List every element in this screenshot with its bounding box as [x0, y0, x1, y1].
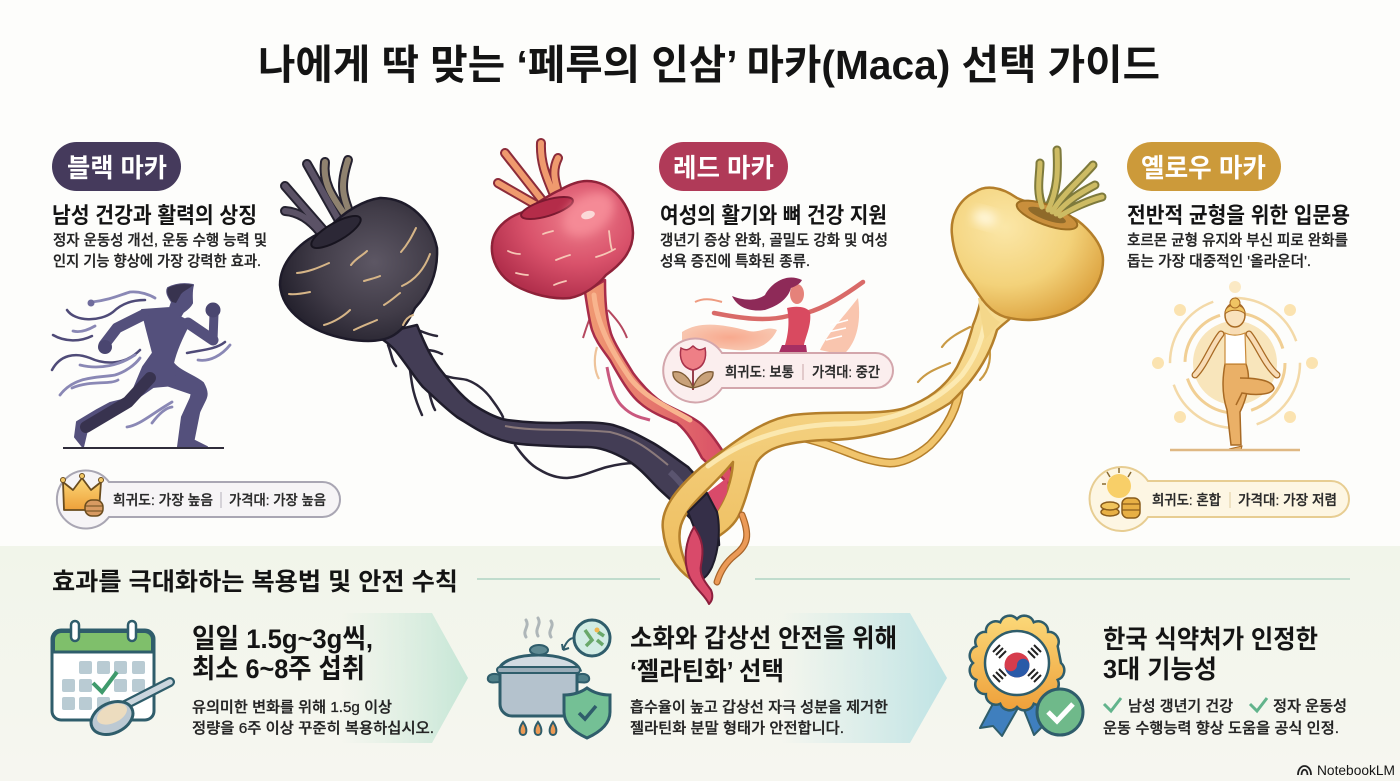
red maca description: 성욕 증진에 특화된 종류.	[660, 253, 810, 270]
black maca turnip	[280, 160, 437, 341]
panel: red maca	[659, 142, 893, 402]
icon: dancing woman	[682, 278, 863, 360]
black maca pill heading: 블랙 마카	[67, 153, 167, 183]
dosage heading: 최소 6~8주 섭취	[192, 654, 365, 684]
red maca turnip	[492, 143, 633, 298]
rarity and price text: 가격대: 중간	[812, 364, 880, 380]
icon: crown and coins	[60, 474, 104, 516]
certification heading	[1103, 626, 1318, 684]
black maca root	[375, 325, 719, 545]
rarity and price text: 희귀도: 혼합	[1152, 492, 1221, 508]
certification heading: 한국 식약처가 인정한	[1103, 626, 1318, 654]
icon: sun and coins	[1101, 468, 1140, 518]
rarity and price text	[725, 364, 880, 380]
title: 나에게 딱 맞는 ‘페루의 인삼’ 마카(Maca) 선택 가이드	[258, 42, 1160, 88]
dosage description: 유의미한 변화를 위해 1.5g 이상	[192, 699, 392, 716]
black maca description: 인지 기능 향상에 가장 강력한 효과.	[53, 253, 261, 270]
rarity and price text	[113, 492, 326, 508]
yellow maca description	[1127, 232, 1348, 270]
panel: yellow maca	[1090, 142, 1350, 531]
black maca subheading: 남성 건강과 활력의 상징	[52, 203, 257, 228]
dosage heading	[192, 624, 373, 684]
icon: yoga tree pose	[1152, 281, 1318, 450]
arrow: gelatinized to certification	[780, 613, 947, 743]
arrow: dosage to gelatinized	[340, 613, 468, 743]
gelatinized heading	[630, 625, 897, 686]
dosage heading: 일일 1.5g~3g씩,	[192, 624, 373, 654]
yellow maca turnip	[952, 150, 1103, 340]
certification list: 정자 운동성	[1273, 698, 1347, 715]
panel: black maca	[52, 142, 340, 528]
gelatinized heading: 소화와 갑상선 안전을 위해	[630, 625, 897, 653]
rarity and price text: 희귀도: 가장 높음	[113, 492, 213, 508]
panel: dosage	[52, 613, 468, 743]
panel: Korean certification	[970, 616, 1347, 737]
icon: running man	[52, 284, 230, 448]
intertwined root tips	[686, 477, 747, 604]
section heading: 효과를 극대화하는 복용법 및 안전 수칙	[52, 568, 458, 596]
gelatinized description: 흡수율이 높고 갑상선 자극 성분을 제거한	[630, 699, 888, 716]
gelatinized heading: ‘젤라틴화’ 선택	[630, 658, 784, 686]
illustration: three maca roots intertwined	[280, 143, 1103, 604]
certification list: 남성 갱년기 건강	[1128, 698, 1233, 715]
red maca description	[660, 232, 888, 270]
yellow maca description: 호르몬 균형 유지와 부신 피로 완화를	[1127, 232, 1348, 249]
yellow maca pill heading	[1127, 142, 1281, 191]
black maca description	[53, 232, 267, 270]
red maca subheading: 여성의 활기와 뼈 건강 지원	[660, 203, 887, 228]
rarity and price badge: yellow	[1090, 467, 1349, 531]
red maca root	[583, 280, 735, 490]
dosage description: 정량을 6주 이상 꾸준히 복용하십시오.	[192, 720, 434, 737]
rarity and price text: 가격대: 가장 저렴	[1238, 492, 1337, 508]
icon: pot with shield	[488, 618, 610, 738]
yellow maca subheading: 전반적 균형을 위한 입문용	[1127, 203, 1350, 228]
black maca pill heading	[52, 142, 181, 191]
yellow maca pill heading: 옐로우 마카	[1141, 153, 1266, 183]
panel: gelatinized form	[488, 613, 947, 743]
icon: calendar and spoon	[52, 621, 170, 741]
red maca pill heading	[659, 142, 788, 191]
yellow maca root	[663, 290, 1013, 580]
icon: flower	[673, 346, 713, 390]
rarity and price text: 가격대: 가장 높음	[229, 492, 326, 508]
red maca description: 갱년기 증상 완화, 골밀도 강화 및 여성	[660, 232, 888, 249]
red maca pill heading: 레드 마카	[673, 153, 774, 183]
certification heading: 3대 기능성	[1103, 656, 1217, 684]
yellow maca description: 돕는 가장 대중적인 '올라운더'.	[1127, 253, 1311, 270]
rarity and price text	[1152, 492, 1337, 508]
watermark: NotebookLM: NotebookLM	[1317, 763, 1395, 778]
certification list	[1103, 698, 1347, 737]
black maca description: 정자 운동성 개선, 운동 수행 능력 및	[53, 232, 267, 249]
rarity and price badge: red	[663, 338, 893, 402]
gelatinized description	[630, 699, 888, 737]
certification list: 운동 수행능력 향상 도움을 공식 인정.	[1103, 720, 1339, 737]
dosage description	[192, 699, 434, 737]
rarity and price text: 희귀도: 보통	[725, 364, 794, 380]
gelatinized description: 젤라틴화 분말 형태가 안전합니다.	[630, 720, 844, 737]
rarity and price badge: black	[57, 470, 340, 528]
icon: medal with Korean flag	[970, 616, 1083, 736]
